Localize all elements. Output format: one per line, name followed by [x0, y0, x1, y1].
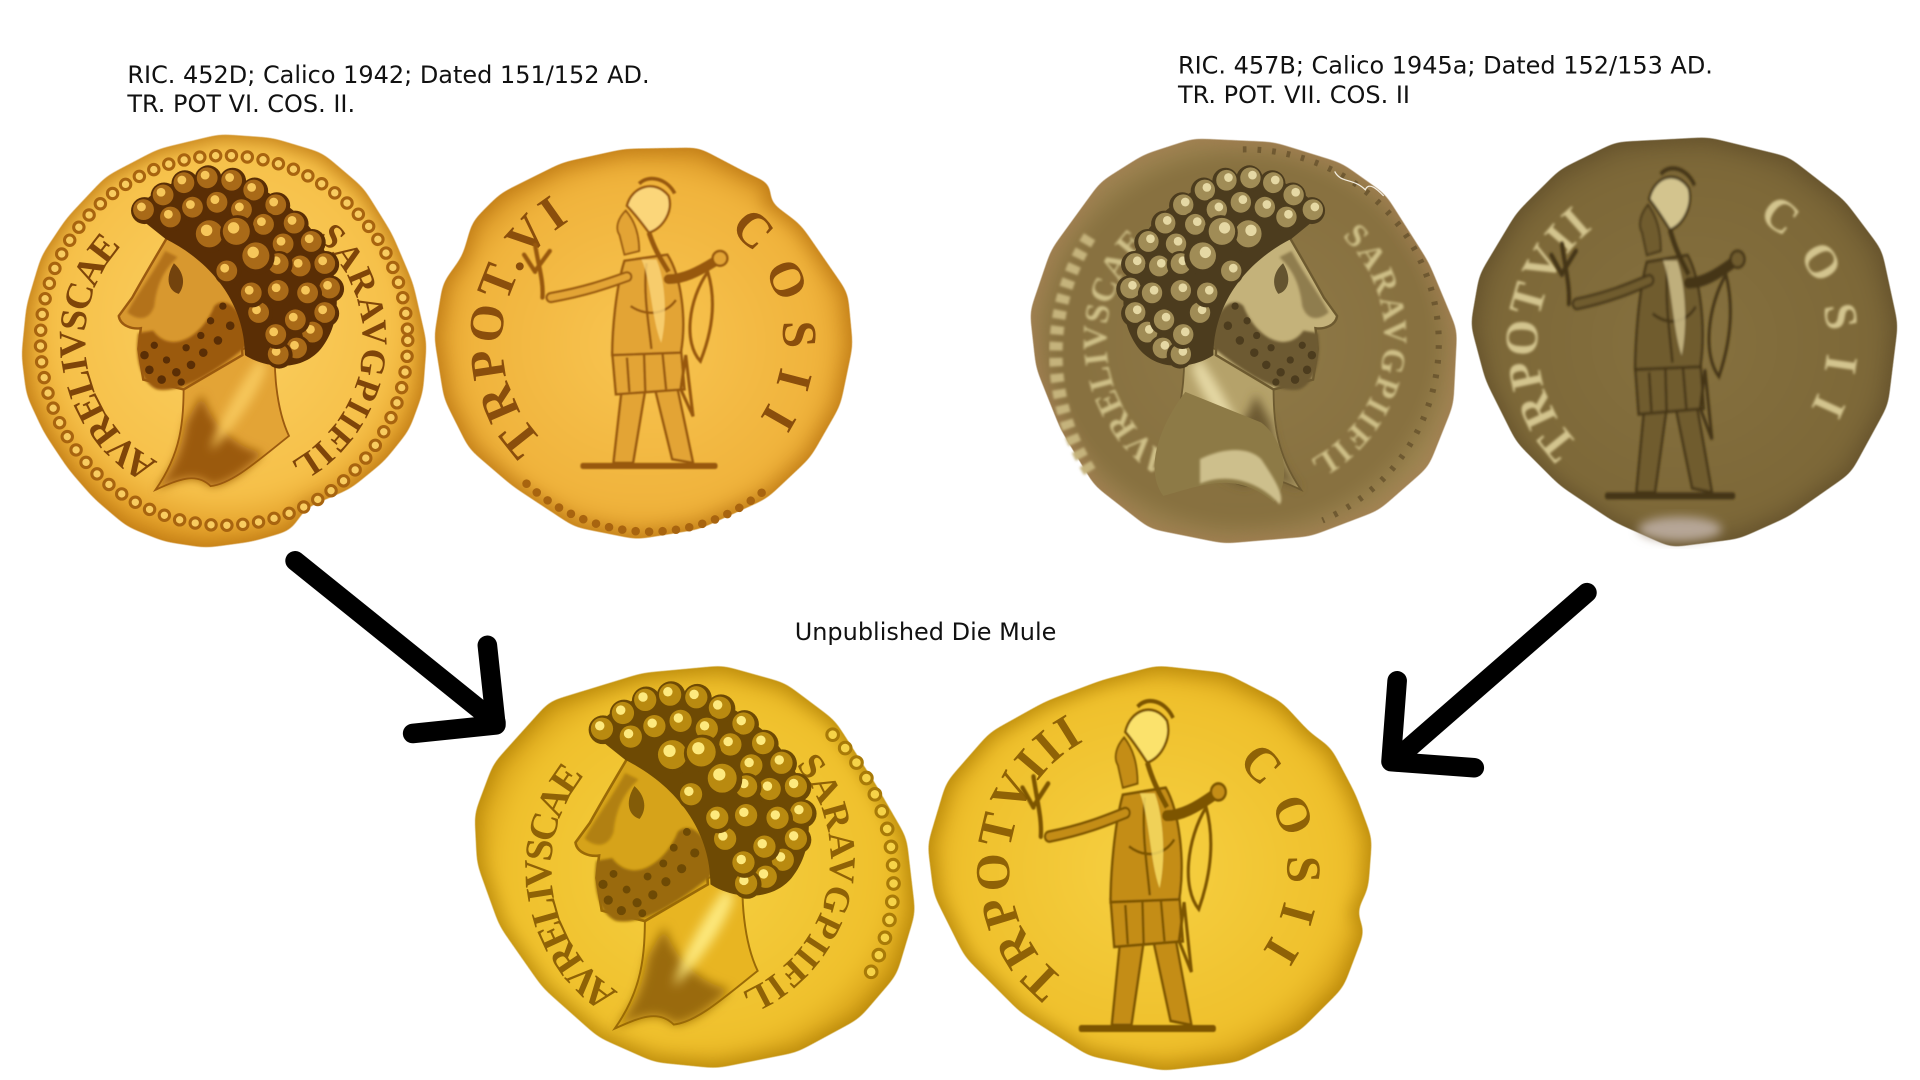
coin: RIC 452D obverse: AVRELIVSCAE — [60, 233, 158, 477]
caption: unpublished die mule: Unpublished Die Mule — [795, 618, 1056, 646]
coin: die mule reverse — [928, 666, 1372, 1070]
coin: RIC 457B obverse: SARAVGPIIFIL — [1311, 224, 1408, 474]
coin: die mule reverse: COSII — [1244, 748, 1320, 966]
caption: left coin reference: RIC. 452D; Calico 1942; Dated 151/152 AD. — [127, 61, 650, 89]
arrow: left coin to mule — [295, 561, 496, 733]
coin: RIC 457B reverse: COSII — [1764, 198, 1858, 420]
coin: die mule obverse: SARAVGPIIFIL — [744, 754, 855, 1009]
coin: RIC 452D reverse: COSII — [736, 212, 816, 433]
coin: die mule reverse: TRPOTVIII — [976, 714, 1082, 1003]
coin: RIC 457B reverse — [1471, 137, 1898, 548]
coin: RIC 452D reverse — [434, 147, 852, 539]
coin: RIC 452D obverse — [22, 134, 426, 548]
caption: left coin reference: TR. POT VI. COS. II. — [126, 90, 355, 118]
coin: RIC 457B reverse: TRPOTVII — [1505, 205, 1592, 464]
coin: RIC 457B obverse — [1030, 138, 1457, 544]
coin: RIC 452D reverse: TRPOT.VI — [470, 196, 568, 461]
arrow: right coin to mule — [1391, 593, 1587, 768]
coin: die mule obverse: AVRELIVSCAE — [525, 763, 618, 1006]
coin: RIC 452D obverse: SARAVGPIIFIL — [292, 225, 387, 476]
caption: right coin reference: TR. POT. VII. COS. II — [1177, 81, 1410, 109]
caption: right coin reference: RIC. 457B; Calico 1945a; Dated 152/153 AD. — [1178, 52, 1713, 80]
coin: die mule obverse — [474, 666, 915, 1068]
coin: RIC 457B obverse: AVRELIVSCAE — [1082, 229, 1157, 473]
